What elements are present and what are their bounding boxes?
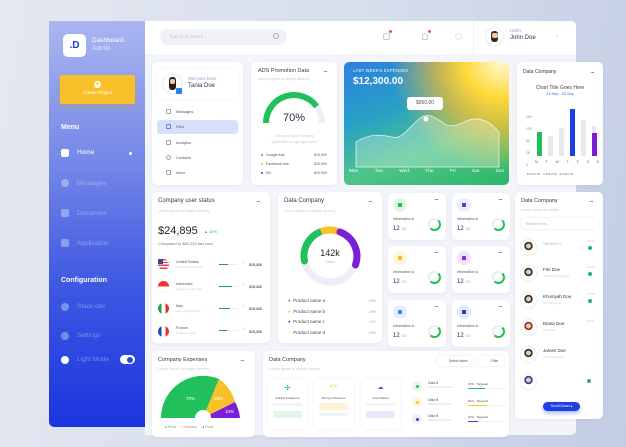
menu items: Document: [77, 210, 107, 217]
info cards grid: [388, 193, 510, 348]
profile card: Tania Doe: [188, 83, 215, 89]
profile card: Contacts: [176, 156, 191, 160]
company expenses card: 20%: [214, 396, 223, 401]
info cards grid: ...: [498, 193, 502, 202]
data rows: Data description here: [428, 419, 453, 422]
data company bottom card: Data Company: [269, 357, 306, 363]
semi pie: [161, 376, 240, 418]
menu items: [61, 149, 132, 247]
scroll down button: [543, 402, 580, 411]
country rows: $15,326: [249, 263, 262, 267]
country rows: ↓: [242, 326, 244, 332]
config items: Stack dev: [77, 303, 106, 310]
profile nav: [157, 120, 238, 134]
country rows: [158, 259, 262, 337]
data company bottom card: Filter: [491, 359, 499, 363]
contacts list card: Vanesa A: [543, 241, 562, 246]
legend: [288, 298, 376, 334]
bar chart card: M: [535, 160, 538, 164]
donut card: Sales: [325, 259, 335, 264]
bar chart card: 0: [526, 163, 528, 167]
bar chart card: 13 Sep - 20 Sep: [546, 92, 574, 96]
header: John Doe: [510, 35, 536, 41]
header: [145, 21, 576, 54]
company user status card: ▲ 10%: [204, 229, 217, 234]
legend: ● Product name b: [288, 308, 325, 314]
info cards grid: Information A: [393, 270, 414, 274]
bar chart card: 50: [526, 139, 530, 143]
search: [160, 29, 287, 45]
data company bottom card: Select dates: [449, 359, 468, 363]
company expenses card: 70%: [186, 396, 195, 401]
country rows: ↑: [242, 304, 244, 310]
legend: ● Product name c: [288, 319, 325, 324]
contacts list card: Marketing: [543, 328, 556, 332]
info cards grid: ...: [498, 246, 502, 255]
donut card: ...: [368, 195, 372, 204]
ads promotion card: Etc: [266, 171, 271, 175]
config items: [61, 303, 135, 364]
ads promotion card: Facebook Ads: [266, 162, 289, 166]
create project button: +: [95, 81, 100, 88]
gauge: [263, 92, 325, 123]
logo: [63, 34, 86, 57]
legend: ● Product name d: [288, 330, 325, 334]
country rows: ↑: [242, 260, 244, 266]
company user status card: Compared to $84,325 last year: [158, 241, 213, 246]
feature tiles: Artificial Intelligence: [275, 396, 300, 400]
legend: 25%: [369, 310, 376, 314]
ads promotion card: ADS Promotion Data: [258, 68, 309, 74]
ads promotion card: ...: [323, 65, 327, 74]
data company bottom card: ☁: [378, 385, 384, 391]
contacts list card: 15:00: [587, 292, 595, 296]
country rows: ↓: [242, 282, 244, 288]
header: ⌄: [555, 33, 559, 39]
contacts list card: 15:00: [587, 239, 595, 243]
info cards grid: 12 /24: [457, 226, 470, 232]
bar chart card: ● Point 01 ● Point 02 ● Point 03: [527, 172, 573, 176]
ads promotion card: $10,000: [314, 162, 327, 166]
data company bottom card: Lorem Ipsum is simply dummy: [269, 367, 320, 371]
donut card: Data Company: [284, 198, 324, 204]
data rows: 60% Targeted: [468, 399, 488, 403]
data company bottom card: Cloud Based: [372, 396, 388, 400]
donut card: [278, 192, 382, 343]
ads promotion card: $10,000: [314, 171, 327, 175]
bar chart card: [517, 62, 603, 185]
brand text: [92, 37, 124, 52]
bars: [537, 109, 596, 156]
legend: 18%: [369, 330, 376, 334]
country rows: $15,326: [249, 330, 262, 334]
info cards grid: ...: [434, 193, 438, 202]
feature tiles: [268, 379, 307, 429]
menu heading: Menu: [61, 124, 79, 131]
data rows: Data B: [428, 414, 438, 418]
info cards grid: 12 /24: [393, 333, 406, 339]
expenses gradient card: Sat: [472, 169, 479, 174]
expenses gradient card: [344, 62, 509, 185]
profile card: Messages: [176, 110, 193, 114]
profile card: Files: [176, 125, 184, 129]
menu items: Application: [77, 240, 109, 247]
bar chart card: Chart Title Goes Here: [536, 85, 584, 91]
ads promotion card: [251, 62, 337, 185]
create project button: Create Project: [83, 90, 112, 95]
contacts list card: Lorem Ipsum is simply: [521, 208, 559, 212]
expenses gradient card: LAST WEEK'S EXPENSES: [353, 68, 408, 73]
ads promotion card: Chance of your tenancy: [274, 134, 314, 138]
config items: Settings: [77, 332, 100, 339]
data rows: 37% Targeted: [468, 382, 488, 386]
ads promotion card: Lorem Ipsum is simply dummy: [258, 77, 309, 81]
company user status card: [152, 192, 270, 343]
expenses gradient card: Thu: [425, 169, 434, 174]
contacts list card: Senior UX Engineer: [543, 274, 570, 278]
company user status card: Company user status: [158, 198, 215, 204]
company expenses card: ...: [240, 354, 244, 363]
configuration heading: Configuration: [61, 277, 107, 284]
header icons: [383, 33, 390, 40]
country rows: France: [176, 326, 188, 330]
donut card: Lorem Ipsum is simply dummy: [284, 209, 335, 213]
info cards grid: Information A: [393, 324, 414, 328]
area chart: [356, 115, 500, 168]
contacts list card: Icon Designer: [543, 301, 562, 305]
expenses gradient card: $12,300.00: [353, 76, 403, 87]
country rows: $15,326: [249, 307, 262, 311]
donut: [300, 226, 361, 286]
header: Hello,: [510, 29, 522, 34]
bar chart card: F: [577, 160, 579, 164]
ads promotion card: Google Ads: [266, 153, 285, 157]
config items: Light Mode: [77, 356, 109, 363]
data rows: Data description here: [428, 403, 453, 406]
country rows: Indonesia: [176, 282, 192, 286]
info cards grid: ...: [498, 300, 502, 309]
profile card: Analytics: [176, 141, 191, 145]
country rows: Deserunt mollit: [176, 331, 196, 335]
ads promotion card: $10,000: [314, 153, 327, 157]
legend: 44%: [369, 299, 376, 303]
data rows: 30% Targeted: [468, 415, 488, 419]
data rows: Data description here: [428, 386, 453, 389]
contacts list card: 15:00: [587, 265, 595, 269]
menu items: Messages: [77, 180, 107, 187]
create project button: [60, 75, 135, 104]
donut card: 142k: [320, 248, 340, 258]
search: Type in to search ..: [169, 34, 207, 39]
ads promotion card: application to get approved: [271, 140, 317, 144]
info cards grid: Information A: [457, 324, 478, 328]
feature tiles: ✣: [285, 385, 290, 392]
contacts list card: Data Company: [521, 198, 558, 204]
data rows: Data B: [428, 398, 438, 402]
contacts list card: 15:00: [587, 319, 595, 323]
expenses gradient card: Wed: [399, 169, 409, 174]
brand text: Admin: [92, 45, 110, 52]
country rows: Sed ut perspiciatis: [176, 309, 201, 313]
data company bottom card: <>: [330, 384, 337, 390]
contacts list card: Khoiriyah Doe: [543, 294, 571, 299]
contacts list card: UI/Ux Designer: [543, 355, 563, 359]
info cards grid: 12 /24: [393, 279, 406, 285]
legend: 12%: [369, 320, 376, 324]
contacts list card: James Doe: [543, 348, 566, 353]
company expenses card: 10%: [225, 409, 234, 414]
country rows: Italy: [176, 304, 183, 308]
info cards grid: 12 /24: [457, 333, 470, 339]
company user status card: $24,895: [158, 225, 198, 237]
profile card: Inbox: [176, 171, 185, 175]
data company bottom card: Strong Architecture: [322, 396, 345, 400]
info cards grid: Information A: [393, 217, 414, 221]
expenses gradient card: Tue: [375, 169, 383, 174]
profile card: [152, 62, 243, 185]
data company bottom card: [263, 351, 509, 437]
bar chart card: W: [556, 160, 559, 164]
info cards grid: Information A: [457, 270, 478, 274]
info cards grid: ...: [434, 246, 438, 255]
expenses gradient card: Mon: [349, 169, 358, 174]
bar chart card: T: [567, 160, 569, 164]
expenses gradient card: Sun: [495, 169, 504, 174]
contacts list card: Diana Doe: [543, 321, 564, 326]
main panel: [145, 21, 576, 435]
bar chart card: 25: [526, 151, 530, 155]
profile card: Welcome back,: [188, 76, 217, 81]
data rows: [412, 381, 506, 424]
menu items: Home: [77, 149, 94, 156]
contacts list card: [515, 192, 603, 419]
company user status card: Lorem Ipsum is simply dummy: [158, 209, 209, 213]
country rows: Excepteur sint occa: [176, 287, 202, 291]
brand text: Dashboard: [92, 37, 124, 44]
ads promotion card: 70%: [283, 112, 305, 124]
expenses gradient card: $950.00: [416, 100, 434, 106]
country rows: $15,326: [249, 285, 262, 289]
company expenses card: Lorem Ipsum is simply dummy: [158, 367, 209, 371]
contacts list card: ...: [589, 195, 593, 204]
data rows: Data A: [428, 381, 438, 385]
scroll down button: Scroll Down ▴: [550, 404, 572, 408]
company expenses card: [152, 351, 255, 437]
bar chart card: Data Company: [523, 69, 556, 75]
company user status card: ...: [256, 195, 260, 204]
info cards grid: 12 /24: [457, 279, 470, 285]
info cards grid: ...: [434, 300, 438, 309]
legend: ● Product name a: [288, 298, 325, 303]
info cards grid: Information A: [457, 217, 478, 221]
bar chart card: 150: [526, 115, 532, 119]
sidebar: [49, 21, 145, 427]
info cards grid: 12 /24: [393, 226, 406, 232]
country rows: Lorem Ipsum simply: [176, 265, 203, 269]
bar chart card: S: [597, 160, 599, 164]
logo: .D: [70, 40, 80, 51]
company expenses card: ● Food ● Grocery ● Food: [165, 425, 213, 429]
expenses gradient card: Fri: [450, 169, 456, 174]
bar chart card: T: [546, 160, 548, 164]
contacts list card: Fitri Doe: [543, 267, 560, 272]
bar chart card: ...: [590, 66, 594, 75]
bar chart card: 100: [526, 127, 532, 131]
bar chart card: S: [586, 160, 589, 164]
company expenses card: Company Expenses: [158, 357, 207, 363]
user: [486, 28, 503, 45]
contacts list card: Search here...: [526, 222, 549, 226]
country rows: United States: [176, 260, 199, 264]
